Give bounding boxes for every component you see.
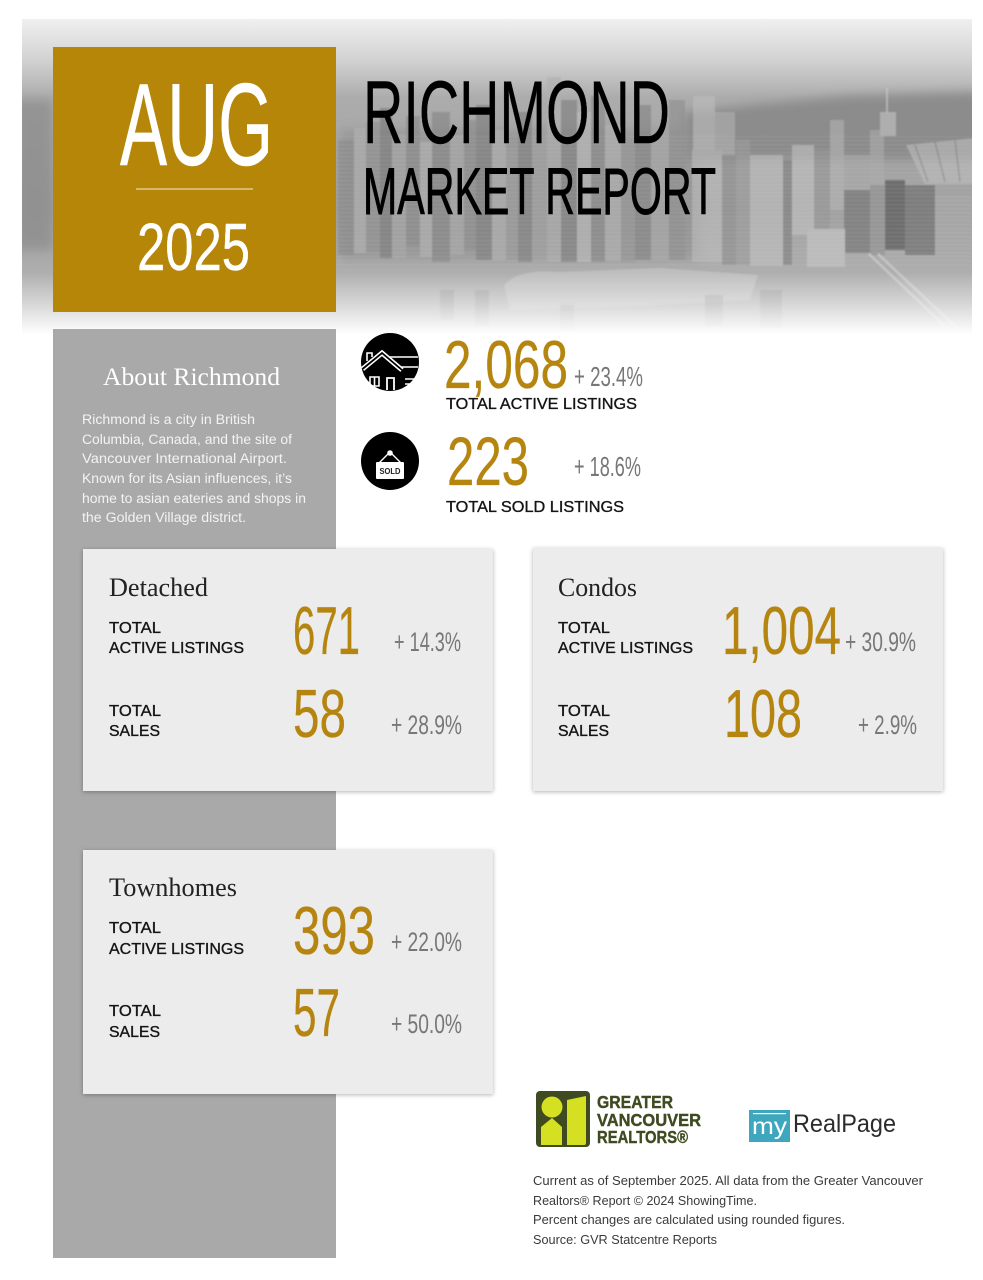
stat: total active listings: + 23.4% (574, 361, 643, 392)
about block: Known for its Asian influences, it’s (82, 471, 292, 486)
panel: detached: + 14.3% (394, 627, 461, 657)
panel: detached: 58 (293, 676, 346, 752)
about block: About Richmond (103, 364, 281, 391)
title: RICHMOND (363, 62, 670, 162)
panel: condos (533, 548, 943, 791)
panel: townhomes: ACTIVE LISTINGS (109, 941, 244, 958)
footer note: Realtors® Report © 2024 ShowingTime. (533, 1194, 757, 1208)
panel: townhomes: 393 (293, 893, 375, 969)
icon: sold sign (361, 432, 419, 490)
about block: home to asian eateries and shops in (82, 491, 306, 506)
panel: detached: SALES (109, 723, 160, 740)
logo: myRealPage (749, 1110, 896, 1142)
year: 2025 (137, 210, 250, 285)
stat: total sold listings: TOTAL SOLD LISTINGS (446, 499, 624, 516)
month: AUG (120, 59, 273, 190)
panel: condos: Condos (558, 573, 637, 602)
panel: detached (83, 549, 493, 791)
panel: detached: TOTAL (109, 703, 161, 720)
logo: myRealPage: my (752, 1113, 788, 1139)
stat: total active listings: TOTAL ACTIVE LISTINGS (446, 396, 637, 413)
about block: Vancouver International Airport. (82, 451, 287, 466)
stat: total active listings: 2,068 (444, 327, 568, 403)
title (363, 62, 716, 228)
panel: townhomes: TOTAL (109, 920, 161, 937)
panel: townhomes: SALES (109, 1024, 160, 1041)
about block: Columbia, Canada, and the site of (82, 432, 292, 447)
panel: condos: 1,004 (722, 593, 841, 669)
about block: Richmond is a city in British (82, 412, 255, 427)
panel: townhomes: TOTAL (109, 1003, 161, 1020)
stat: total sold listings: 223 (447, 423, 529, 500)
panel: detached: 671 (293, 593, 360, 669)
header photo banner: city skyline (15, 19, 980, 355)
icon: sold sign: SOLD (380, 467, 401, 476)
panel: condos: + 2.9% (858, 710, 917, 740)
logo: myRealPage: RealPage (793, 1110, 896, 1138)
panel: townhomes (83, 850, 493, 1094)
panel: detached: ACTIVE LISTINGS (109, 640, 244, 657)
panel: detached: + 28.9% (391, 710, 462, 740)
gold date panel (53, 47, 336, 312)
logo: Greater Vancouver Realtors: GREATER (597, 1092, 673, 1112)
left grey sidebar panel (53, 329, 336, 1258)
title: MARKET REPORT (363, 154, 716, 228)
panel: detached: TOTAL (109, 620, 161, 637)
panel: condos: + 30.9% (845, 627, 916, 657)
panel: townhomes: + 22.0% (391, 927, 462, 957)
panel: condos: ACTIVE LISTINGS (558, 640, 693, 657)
stat: total sold listings (446, 423, 641, 516)
logo: Greater Vancouver Realtors (536, 1091, 701, 1147)
panel: townhomes: + 50.0% (391, 1009, 462, 1039)
panel: townhomes: Townhomes (109, 873, 237, 902)
panel: condos: TOTAL (558, 703, 610, 720)
icon: house (361, 333, 419, 391)
logo: Greater Vancouver Realtors: VANCOUVER (597, 1110, 701, 1130)
panel: detached: Detached (109, 573, 208, 602)
footer note: Current as of September 2025. All data from the Greater Vancouver (533, 1174, 923, 1188)
logo: Greater Vancouver Realtors: REALTORS® (597, 1127, 688, 1147)
panel: condos: SALES (558, 723, 609, 740)
panel: condos: 108 (724, 676, 802, 752)
panel: townhomes: 57 (293, 975, 340, 1051)
footer note: Source: GVR Statcentre Reports (533, 1233, 717, 1247)
about block (82, 364, 306, 525)
stat: total sold listings: + 18.6% (574, 451, 641, 482)
about block: the Golden Village district. (82, 510, 246, 525)
footer note: Percent changes are calculated using rounded figures. (533, 1213, 845, 1227)
footer note (533, 1174, 923, 1247)
panel: condos: TOTAL (558, 620, 610, 637)
